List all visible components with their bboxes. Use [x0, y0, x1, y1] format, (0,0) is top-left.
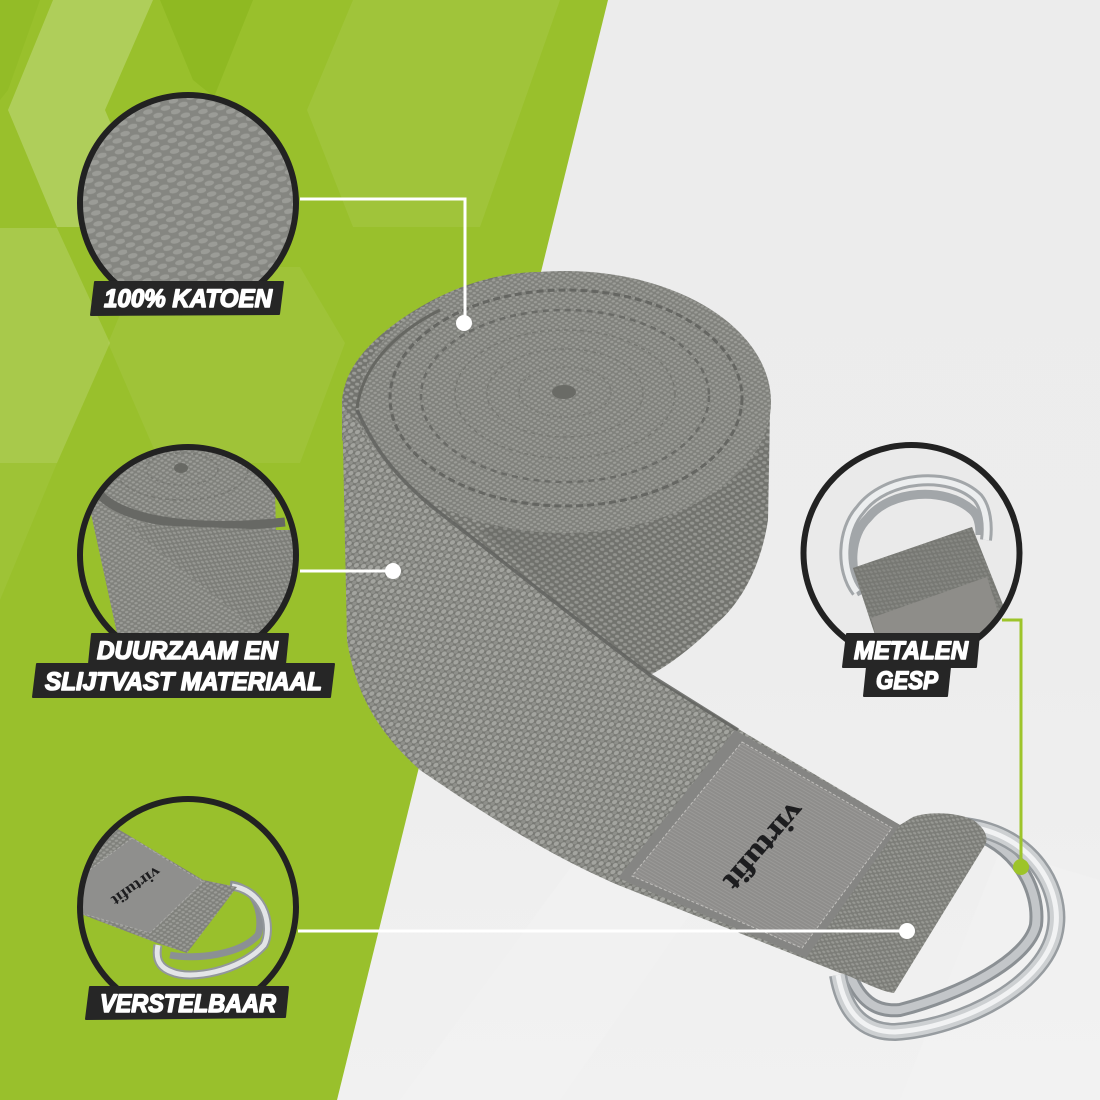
product: rolled strap with D-ring — [342, 271, 1056, 1032]
embroidered logo small: virtufit — [107, 863, 164, 909]
connector dot: katoen — [456, 315, 472, 331]
label: duurzaam en slijtvast materiaal: SLIJTVAST MATERIAAL — [45, 668, 322, 696]
circle: metal buckle close-up — [804, 445, 1020, 670]
label: 100% katoen: 100% KATOEN — [104, 285, 273, 313]
roll top face with wound rings — [357, 271, 771, 533]
connector dot: verstelbaar — [899, 923, 915, 939]
connector: materiaal — [300, 570, 392, 572]
strap end folded over ring — [800, 813, 987, 993]
label: verstelbaar: VERSTELBAAR — [100, 990, 276, 1018]
connector dot: materiaal — [385, 563, 401, 579]
label: duurzaam en slijtvast materiaal — [33, 634, 334, 697]
embroidered logo: virtufit — [717, 796, 811, 897]
connector dot: gesp green — [1013, 859, 1029, 875]
circle: roll close-up — [77, 444, 299, 633]
connector: gesp green — [1002, 620, 1021, 867]
roll silhouette and side — [342, 272, 770, 675]
sewn label patch — [618, 730, 900, 958]
label: duurzaam en slijtvast materiaal: DUURZAAM EN — [97, 637, 279, 665]
connector: verstelbaar — [298, 930, 907, 932]
background: green diagonal panel with facets — [0, 0, 608, 1100]
circle: fabric close-up — [80, 95, 296, 311]
front strap band — [342, 400, 900, 957]
label: metalen gesp: METALEN — [854, 637, 969, 665]
connector: katoen — [300, 199, 465, 323]
label: metalen gesp: GESP — [876, 667, 938, 695]
label: metalen gesp — [843, 634, 979, 696]
D-ring — [838, 826, 1056, 1032]
circle: adjustable strap close-up — [77, 796, 299, 986]
